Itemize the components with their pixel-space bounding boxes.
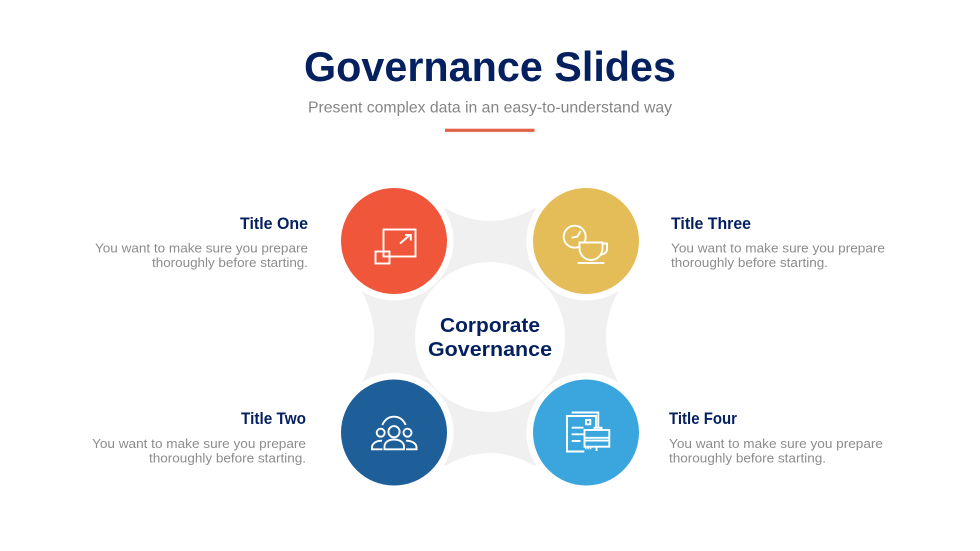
text block: title three: thoroughly before starting. <box>671 255 828 270</box>
text block: title three: Title Three <box>671 215 751 233</box>
central diagram <box>334 182 646 492</box>
text block: title four <box>669 410 883 466</box>
text block: title two: Title Two <box>241 410 306 428</box>
text block: title three <box>671 215 885 270</box>
text block: title two: thoroughly before starting. <box>149 450 306 466</box>
header <box>304 43 676 132</box>
title: Governance Slides <box>304 43 676 90</box>
icon: team <box>372 417 416 449</box>
text block: title two <box>92 410 306 466</box>
node: yellow <box>526 182 646 300</box>
icon: clock and cup <box>564 226 607 263</box>
text block: title four: Title Four <box>669 410 738 428</box>
text block: title two: You want to make sure you prepare <box>92 436 306 451</box>
icon: resize squares <box>376 230 416 264</box>
text block: title one: You want to make sure you prepare <box>95 240 308 256</box>
subtitle: Present complex data in an easy-to-understand way <box>308 100 672 116</box>
text block: title three: You want to make sure you prepare <box>671 240 885 256</box>
node: light blue <box>526 373 646 492</box>
node: red <box>334 182 454 300</box>
text block: title one: Title One <box>240 215 308 233</box>
node: dark blue <box>334 373 454 492</box>
centre label <box>428 314 552 361</box>
text block: title four: You want to make sure you prepare <box>669 436 883 451</box>
text block: title one <box>95 215 308 270</box>
text block: title four: thoroughly before starting. <box>669 450 826 466</box>
centre circle <box>415 262 565 412</box>
centre label: Governance <box>428 338 552 361</box>
centre label: Corporate <box>440 314 540 337</box>
icon: document and card <box>567 412 609 452</box>
text block: title one: thoroughly before starting. <box>152 255 308 270</box>
accent underline <box>445 129 534 132</box>
grey connector shape <box>362 208 618 466</box>
